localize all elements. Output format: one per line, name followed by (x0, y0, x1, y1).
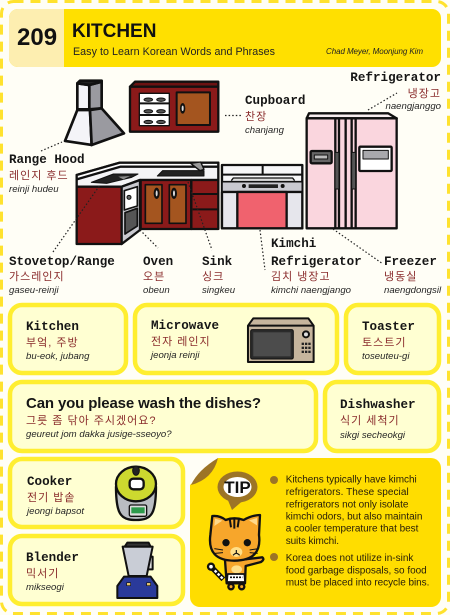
panel: tip (190, 458, 441, 607)
label: freezer (384, 255, 442, 296)
inner ears (214, 518, 257, 526)
label: kimchi refrigerator: Refrigerator (271, 255, 362, 269)
panel: dishwasher (325, 382, 439, 451)
label: kimchi refrigerator: Kimchi (271, 237, 317, 251)
sink (157, 171, 204, 176)
feet (228, 584, 234, 589)
label: sink: Sink (202, 255, 233, 269)
panel: toaster: toseuteu-gi (362, 351, 410, 362)
label: cupboard: Cupboard (245, 94, 305, 108)
label: oven (143, 255, 173, 296)
oven (122, 180, 140, 244)
tip bullet 1: refrigerators not only isolate (286, 499, 409, 510)
panel: cooker: jeongi bapsot (25, 506, 84, 517)
label: cupboard: chanjang (245, 125, 285, 136)
panel: phrase: Can you please wash the dishes? (26, 395, 261, 412)
panel: microwave: jeonja reinji (149, 350, 200, 361)
label: range hood: reinji hudeu (9, 184, 59, 195)
icon: rice cooker (116, 466, 156, 520)
icon: kitchen counter with stovetop, oven and sink (77, 162, 218, 244)
head (210, 515, 260, 561)
stovetop (91, 174, 138, 183)
panel: blender: mikseogi (26, 582, 65, 593)
panel: microwave (135, 305, 337, 373)
muzzle (230, 547, 242, 557)
drawers (191, 180, 218, 229)
label: refrigerator: Refrigerator (350, 71, 441, 85)
icon: cat mascot (208, 515, 263, 589)
label: stovetop (9, 255, 115, 296)
panel: phrase: 그릇 좀 닦아 주시겠어요? (26, 414, 156, 427)
panel: toaster: 토스트기 (362, 336, 406, 349)
panel: kitchen: 부엌, 주방 (26, 336, 79, 349)
stripes and whiskers (230, 518, 239, 529)
label: oven: Oven (143, 255, 173, 269)
lesson number: 209 (17, 24, 57, 51)
tip bullet 1: Kitchens typically have kimchi (286, 475, 417, 486)
label: refrigerator: naengjanggo (386, 101, 442, 112)
cabinet doors (141, 180, 191, 229)
label: stovetop: 가스레인지 (9, 270, 65, 283)
label: range hood (9, 153, 85, 195)
tip bullet 2: Korea does not utilize in-sink (286, 553, 414, 564)
eyes (222, 539, 230, 546)
label: oven: 오븐 (143, 271, 165, 283)
tip speech bubble: TIP (224, 478, 251, 497)
icon: refrigerator (307, 113, 397, 228)
panel: toaster: Toaster (362, 320, 415, 334)
label: freezer: naengdongsil (384, 285, 442, 296)
panel: kitchen (10, 305, 126, 373)
label: cupboard: 찬장 (245, 109, 267, 123)
tip bullet 2: food garbage disposals, so food (286, 565, 427, 576)
label: kimchi refrigerator: 김치 냉장고 (271, 270, 331, 283)
icon: range hood (65, 81, 124, 145)
icon: blender (117, 543, 157, 598)
panel: cooker (10, 459, 183, 527)
callout lines (41, 93, 397, 270)
tail (212, 567, 223, 579)
nose and mouth (233, 550, 240, 555)
icon: cupboard (130, 82, 218, 132)
panel: kitchen: Kitchen (26, 320, 79, 334)
label: sink: singkeu (202, 285, 236, 296)
tip bullet 1: suits kimchi. (286, 536, 339, 547)
subtitle: Easy to Learn Korean Words and Phrases (73, 46, 275, 58)
label: cupboard (245, 94, 305, 136)
label: range hood: 레인지 후드 (9, 169, 69, 182)
label: kimchi refrigerator (271, 237, 362, 296)
tip bullet 1: kimchi odors, but also maintain (286, 511, 422, 522)
label: sink: 싱크 (202, 270, 224, 283)
panel: microwave: 전자 레인지 (151, 335, 211, 348)
label: freezer: Freezer (384, 255, 437, 269)
panel: dishwasher: Dishwasher (340, 398, 416, 412)
panel: microwave: Microwave (151, 319, 219, 333)
icon: kimchi refrigerator (222, 165, 302, 228)
panel: kitchen: bu-eok, jubang (26, 351, 90, 362)
label: refrigerator (350, 71, 442, 112)
icon: microwave (248, 318, 314, 362)
panel: cooker: Cooker (27, 475, 72, 489)
tip bullet 1: a cooler temperature that best (286, 524, 419, 535)
label: refrigerator: 냉장고 (408, 87, 441, 100)
panel: toaster (346, 305, 439, 373)
label: sink (202, 255, 236, 296)
header banner (9, 9, 441, 67)
tip speech bubble (218, 472, 258, 510)
panel: blender: 믹서기 (26, 567, 59, 580)
left cabinet (77, 187, 122, 244)
authors: Chad Meyer, Moonjung Kim (326, 47, 423, 56)
cat body and raised arm (225, 557, 263, 583)
label: range hood: Range Hood (9, 153, 85, 167)
panel: dishwasher: 식기 세척기 (340, 414, 400, 427)
label: oven: obeun (143, 285, 170, 296)
label: kimchi refrigerator: kimchi naengjango (271, 285, 352, 296)
label: stovetop: Stovetop/Range (9, 255, 115, 269)
label: freezer: 냉동실 (384, 270, 417, 283)
apron (227, 574, 245, 582)
title: KITCHEN (72, 21, 156, 42)
counter top (77, 163, 218, 187)
panel: dishwasher: sikgi secheokgi (340, 430, 406, 441)
tip bullet 2 (270, 553, 429, 589)
page fold (191, 458, 218, 485)
tip bullet 2: must be placed into recycle bins. (286, 578, 429, 589)
tip bullet 1: refrigerators. These special (286, 487, 409, 498)
panel: blender (10, 536, 183, 604)
panel: blender: Blender (26, 551, 79, 565)
panel: cooker: 전기 밥솥 (27, 491, 76, 504)
panel: phrase: geureut jom dakka jusige-sseoyo? (26, 429, 172, 440)
tip bullet 1 (270, 475, 422, 547)
label: stovetop: gaseu-reinji (9, 285, 59, 296)
panel: phrase (10, 382, 316, 451)
